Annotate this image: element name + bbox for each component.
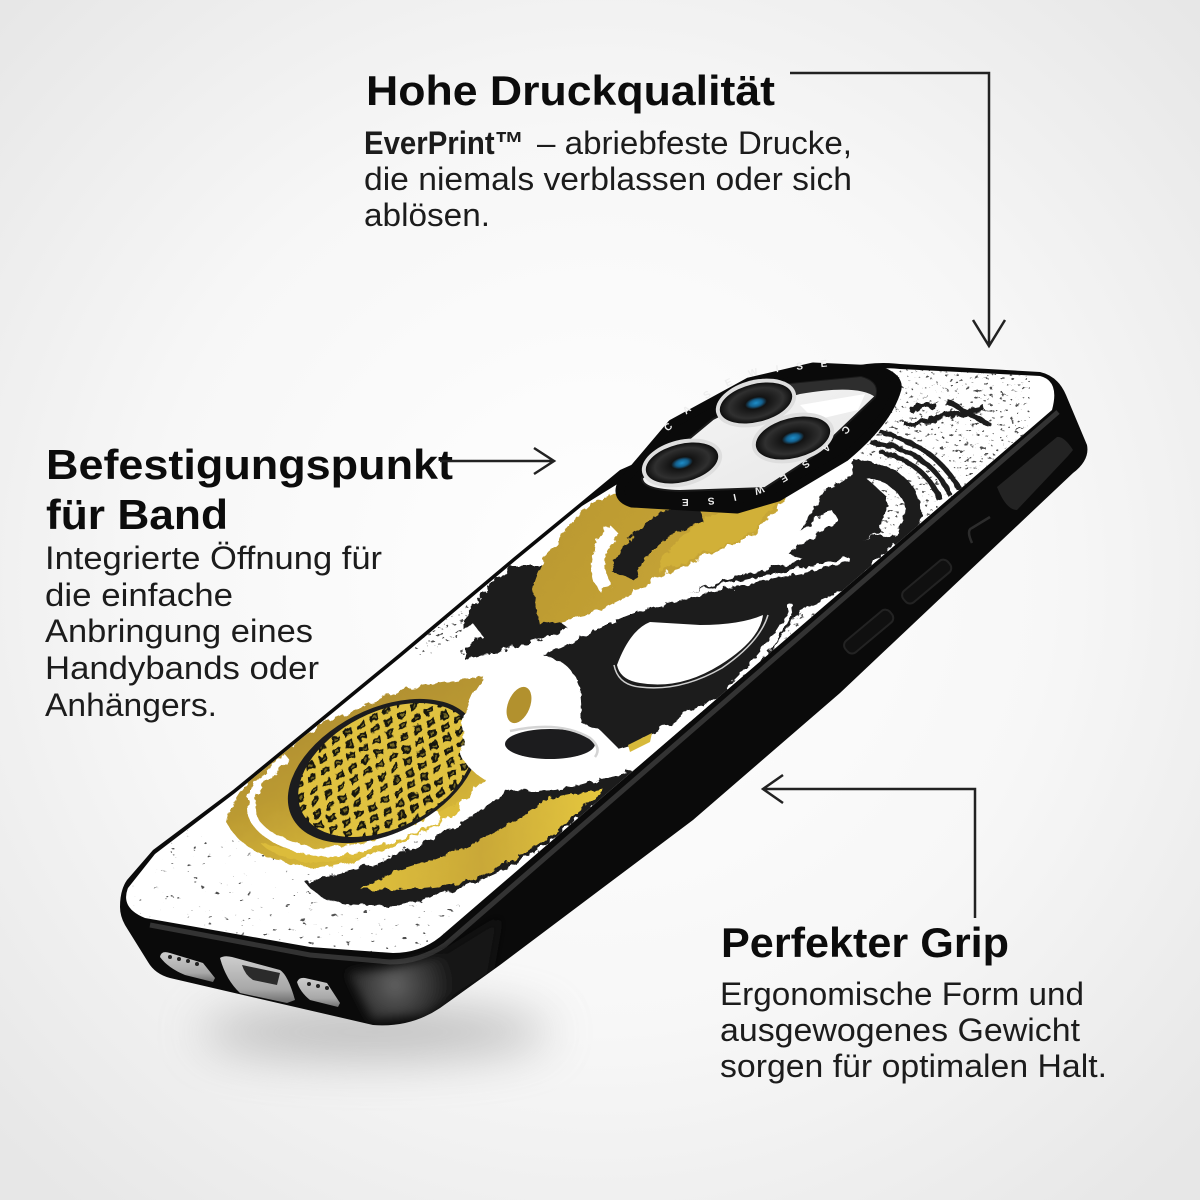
usb port	[220, 956, 295, 1003]
gold patch in ring	[506, 686, 532, 724]
bumper highlight	[150, 412, 1058, 962]
heading: Befestigungspunkt	[46, 441, 453, 488]
body text: ausgewogenes Gewicht	[720, 1012, 1080, 1048]
speaker right	[297, 978, 340, 1007]
lens 3	[637, 431, 727, 495]
callout: print quality	[364, 67, 852, 233]
lower gold crescent	[360, 789, 603, 890]
leaf outline	[614, 615, 768, 688]
brand text bottom: CASEWISE	[682, 426, 850, 506]
body text	[45, 540, 382, 723]
callout: grip	[720, 919, 1107, 1084]
speaker left	[160, 952, 215, 982]
lower dark crescent	[305, 765, 650, 906]
heading: Hohe Druckqualität	[366, 67, 775, 114]
body text: ablösen.	[364, 197, 490, 233]
body text: die niemals verblassen oder sich	[364, 161, 852, 197]
body text: die einfache	[45, 577, 233, 613]
hole outline	[510, 727, 598, 757]
speckle: bottom left	[130, 830, 460, 960]
speckle: top right	[860, 365, 1030, 555]
corner sheen	[347, 918, 500, 1020]
body text: Ergonomische Form und	[720, 976, 1084, 1012]
body text: Handybands oder	[45, 650, 319, 686]
side button: volume up	[900, 557, 954, 606]
mesh	[298, 703, 469, 837]
upper black blob	[787, 470, 887, 563]
brush strokes top right	[870, 400, 990, 500]
body text: Integrierte Öffnung für	[45, 540, 382, 576]
white band across	[533, 515, 835, 650]
camera plate	[642, 377, 876, 491]
phone shadow	[200, 1006, 550, 1058]
body text: – abriebfeste Drucke,	[537, 125, 852, 161]
side button: camera control	[997, 437, 1073, 510]
white swoosh in upper gold	[597, 530, 615, 588]
plate highlight	[800, 394, 865, 420]
body text: Anbringung eines	[45, 613, 313, 649]
body text: EverPrint™	[364, 125, 524, 161]
arrow: grip	[763, 775, 975, 918]
lens 1	[711, 371, 801, 435]
brand text top: CASEWISE	[664, 360, 828, 430]
heading: für Band	[46, 491, 228, 538]
white band at left	[441, 623, 484, 655]
middle black area	[533, 535, 897, 750]
upper dark arc	[853, 467, 913, 545]
white inner arc	[251, 757, 440, 853]
black ring hole	[505, 729, 595, 759]
lower gold disc	[227, 672, 510, 868]
case body	[120, 363, 1087, 1025]
phone case	[120, 360, 1088, 1026]
arrow: strap anchor	[440, 448, 554, 474]
callout: strap anchor	[45, 441, 453, 723]
heading	[46, 441, 453, 538]
arrow: print quality	[790, 73, 1005, 346]
bright lobe of upper gold	[659, 503, 774, 574]
camera bumper	[620, 367, 897, 509]
body text	[720, 976, 1107, 1084]
mesh dark ring	[288, 698, 472, 844]
bottom gold disc highlight	[262, 800, 460, 862]
lens 2	[746, 405, 840, 471]
speckle: left edge	[415, 604, 470, 655]
heading: Perfekter Grip	[721, 919, 1009, 966]
upper gold brush	[533, 480, 790, 625]
upper-left black	[465, 565, 570, 660]
white leaf in middle	[617, 615, 763, 685]
inner shade	[760, 377, 876, 405]
body text: Anhängers.	[45, 687, 217, 723]
back face artwork	[126, 368, 1054, 953]
side button: volume down	[842, 607, 896, 656]
right white fringe	[690, 605, 792, 722]
bottom ports	[160, 952, 340, 1007]
white ring	[470, 655, 700, 779]
speckle: right edge	[721, 610, 820, 695]
camera island	[615, 360, 902, 514]
side button: action	[969, 517, 990, 543]
dark stroke in upper gold	[622, 510, 700, 575]
body text	[364, 125, 852, 233]
gold chip	[628, 733, 652, 752]
body text: sorgen für optimalen Halt.	[720, 1048, 1107, 1084]
